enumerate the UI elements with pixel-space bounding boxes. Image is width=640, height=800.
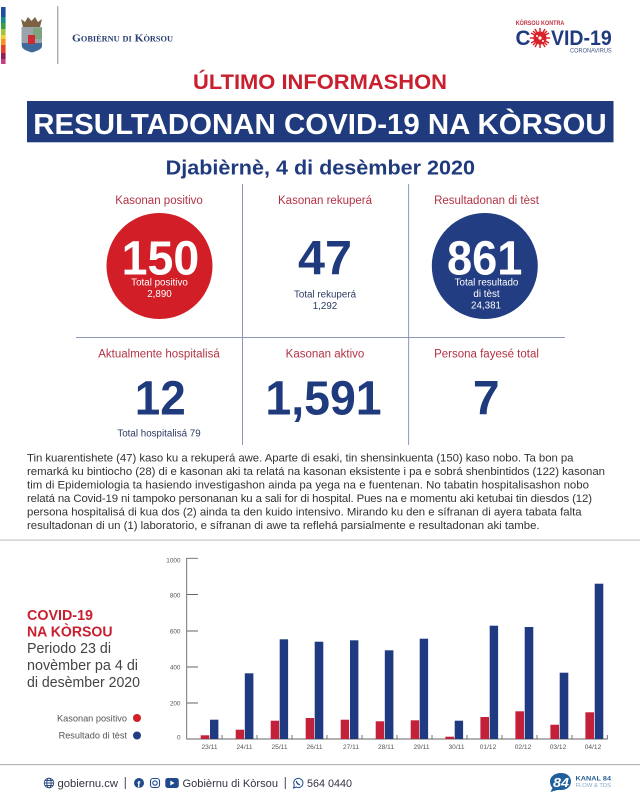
- body text: tim di Epidemiologia ta hasiendo investigashon ainda pa yega na e fuentenan. No tabatin hospitalisashon nobo: [27, 480, 589, 492]
- stat: Resultadonan di tèst: 24,381: [471, 300, 501, 312]
- icon: globe: [44, 778, 54, 788]
- banner: RESULTADONAN COVID-19 NA KÒRSOU: [33, 107, 607, 141]
- icon: facebook: [134, 778, 144, 790]
- logo: Kòrsou kontra Covid-19: CORONAVIRUS: [570, 48, 612, 54]
- x axis labels: 23/11: [201, 744, 218, 751]
- stat: Kasonan rekuperá: [278, 195, 373, 312]
- logo: Kanal 84: FLOW & TDS: [576, 783, 611, 789]
- logo: Kòrsou kontra Covid-19: VID-19: [551, 27, 612, 50]
- logo: Kanal 84: [550, 773, 611, 792]
- x axis labels: 26/11: [306, 744, 323, 751]
- stat: Kasonan rekuperá: Kasonan rekuperá: [278, 195, 373, 207]
- stat: Persona fayesé total: [434, 349, 539, 425]
- x axis labels: 29/11: [413, 744, 430, 751]
- x axis labels: 28/11: [378, 744, 394, 751]
- stat: Aktualmente hospitalisá: 12: [135, 372, 186, 425]
- stat: Kasonan positivo: [106, 195, 212, 319]
- rainbow strip: [1, 7, 6, 64]
- stat: Resultadonan di tèst: Resultadonan di tèst: [434, 195, 540, 207]
- stat: Kasonan positivo: 2,890: [147, 289, 172, 300]
- website: gobiernu.cw: [58, 778, 119, 790]
- bar chart: [166, 558, 607, 751]
- x axis labels: 03/12: [550, 744, 567, 751]
- stat: Kasonan aktivo: [265, 349, 382, 425]
- body text: remarká ku bintiocho (28) di e kasonan aki ta relatá na kasonan eksistente i pa e sobrá shenbintidos (122) kasonan: [27, 466, 605, 478]
- social account name: Gobièrnu di Kòrsou: [182, 778, 278, 790]
- logo: Kanal 84: KANAL 84: [576, 776, 611, 782]
- header: government identity: [1, 6, 173, 64]
- icon: instagram: [150, 778, 160, 788]
- stat: Aktualmente hospitalisá: Total hospitalisá 79: [117, 428, 201, 440]
- y axis labels: 800: [170, 592, 181, 600]
- icon: coat of arms: [21, 17, 42, 52]
- icon: facebook: f: [137, 780, 141, 790]
- x axis labels: 01/12: [480, 744, 497, 751]
- stat: Persona fayesé total: Persona fayesé total: [434, 349, 539, 361]
- stat: Kasonan rekuperá: Total rekuperá: [294, 290, 357, 300]
- government name: Gobièrnu di Kòrsou: [72, 32, 173, 44]
- stat: Resultadonan di tèst: Total resultado: [455, 278, 519, 288]
- stat: Kasonan positivo: 150: [122, 232, 199, 285]
- x axis labels: 27/11: [343, 744, 359, 751]
- y axis labels: 0: [177, 734, 181, 742]
- logo: Kanal 84: 84: [553, 775, 570, 790]
- stat: Resultadonan di tèst: [432, 195, 540, 319]
- x axis labels: 30/11: [448, 744, 465, 751]
- x axis labels: 04/12: [585, 744, 602, 751]
- chart description: di desèmber 2020: [27, 675, 140, 691]
- logo: Kòrsou kontra Covid-19: C: [516, 27, 530, 50]
- icon: youtube: [165, 778, 179, 788]
- title: ÚLTIMO INFORMASHON: [193, 69, 447, 94]
- stat: Kasonan positivo: Total positivo: [131, 278, 188, 288]
- body text: [27, 452, 605, 532]
- stat: Kasonan aktivo: Kasonan aktivo: [286, 349, 364, 361]
- y axis labels: 400: [170, 664, 181, 672]
- phone number: 564 0440: [307, 778, 352, 790]
- stat: Kasonan rekuperá: 47: [298, 232, 352, 285]
- stat: Kasonan rekuperá: 1,292: [313, 301, 337, 312]
- logo: Kòrsou kontra Covid-19: [516, 18, 612, 54]
- date heading: Djabièrnè, 4 di desèmber 2020: [166, 157, 475, 179]
- stat: Aktualmente hospitalisá: [98, 349, 220, 440]
- chart description: Periodo 23 di: [27, 641, 111, 657]
- stat: Kasonan aktivo: 1,591: [265, 372, 382, 425]
- footer contacts: [44, 777, 352, 790]
- legend: Kasonan positivo: Kasonan positivo: [57, 714, 127, 724]
- x axis labels: 24/11: [236, 744, 253, 751]
- stat: Persona fayesé total: 7: [473, 372, 500, 425]
- stat: Resultadonan di tèst: 861: [447, 232, 522, 285]
- body text: relatá na Covid-19 ni tampoko personanan ku a sali for di hospital. Pues na e momentu aki ketubai tin diesdos (12): [27, 493, 592, 505]
- chart description: [27, 608, 140, 691]
- blue bars: Resultado di tèst: [210, 584, 603, 739]
- chart axes: [187, 558, 607, 739]
- chart description: novèmber pa 4 di: [27, 658, 138, 674]
- x axis labels: 25/11: [271, 744, 288, 751]
- stat: Kasonan positivo: Kasonan positivo: [115, 195, 203, 207]
- x axis labels: [201, 744, 602, 751]
- y axis labels: 200: [170, 700, 181, 708]
- stat: Aktualmente hospitalisá: Aktualmente hospitalisá: [98, 349, 220, 361]
- stat: Resultadonan di tèst: di tèst: [473, 289, 500, 300]
- icon: virus: [530, 28, 550, 48]
- y axis labels: 1000: [166, 558, 181, 564]
- y axis labels: 600: [170, 628, 181, 636]
- body text: resultadonan di un (1) laboratorio, e sífranan di awe ta reflehá parsialmente e resultadonan aki tambe.: [27, 520, 540, 532]
- x axis labels: 02/12: [515, 744, 532, 751]
- chart description: COVID-19: [27, 608, 93, 624]
- red bars: Kasonan positivo: [201, 711, 594, 739]
- chart description: NA KÒRSOU: [27, 623, 112, 641]
- legend: [57, 714, 141, 740]
- logo: Kòrsou kontra Covid-19: KÒRSOU KONTRA: [516, 18, 565, 27]
- stats grid: [76, 184, 565, 445]
- legend: Resultado di tèst: Resultado di tèst: [59, 730, 127, 740]
- body text: persona hospitalisá di kua dos (2) ainda ta den kuido intensivo. Mirando ku den e sífranan di ayera tabata falta: [27, 506, 582, 518]
- icon: whatsapp: [294, 778, 303, 788]
- y axis labels: [166, 558, 181, 742]
- body text: Tin kuarentishete (47) kaso ku a rekuperá awe. Aparte di esaki, tin shensinkuenta (150) kaso nobo. Ta bon pa: [27, 452, 574, 464]
